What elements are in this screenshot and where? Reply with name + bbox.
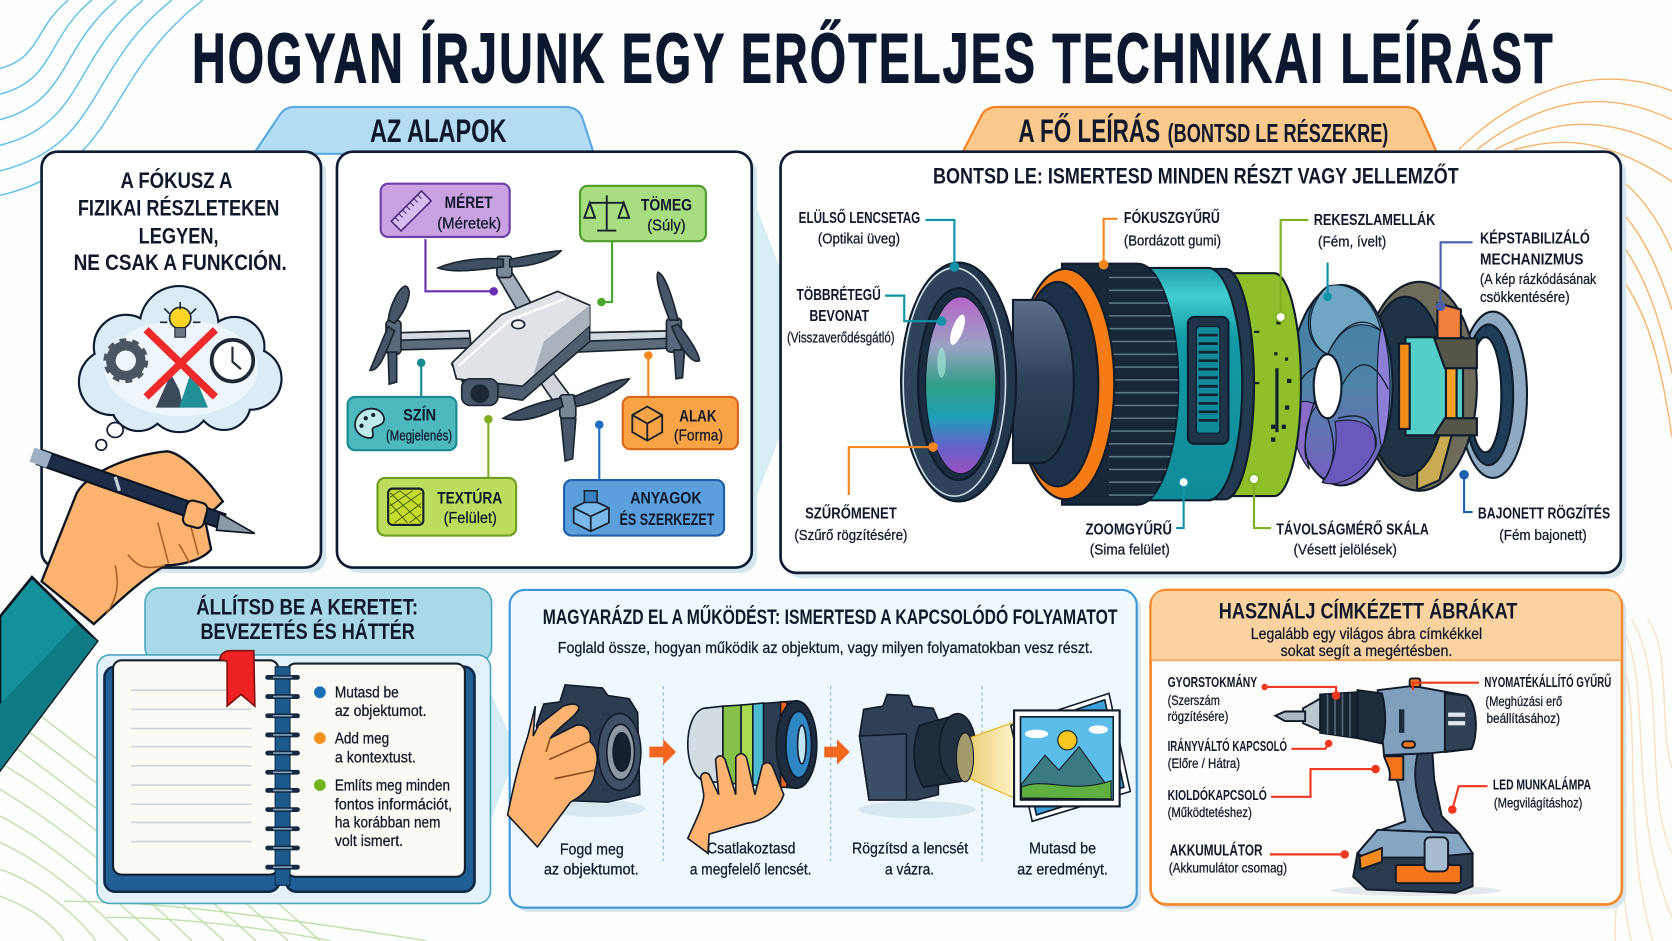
step 4: show the result: Mutasd be [1029,840,1096,857]
pale connector arrows [486,182,784,832]
heading: BEVEZETÉS ÉS HÁTTÉR [200,619,415,644]
intro checklist: Add meg [335,730,389,747]
label: materials [564,480,724,536]
callout: zoom ring: (Sima felület) [1090,542,1170,559]
callout: focus ring [1124,208,1221,250]
callout: aperture blades [1314,210,1436,251]
callout: coating [787,285,895,347]
callout: bayonet: (Fém bajonett) [1499,527,1587,544]
callout: front element [799,208,920,247]
decorative curves: bottom right [1615,619,1672,941]
heading band: Legalább egy világos ábra címkékkel [1251,626,1482,643]
label: mass [580,186,706,241]
focus statement: NE CSAK A FUNKCIÓN. [74,250,287,275]
callout: torque ring: NYOMATÉKÁLLÍTÓ GYŰRŰ [1484,673,1611,691]
callout: trigger: (Működtetéshez) [1168,804,1252,820]
callout: front element: (Optikai üveg) [818,230,900,247]
leader lines [417,239,653,480]
drone illustration [370,251,700,461]
intro checklist: ha korábban nem [335,815,440,832]
intro checklist [314,685,452,850]
notebook [104,651,475,892]
decorative curves: top right [1459,79,1672,437]
icon: bookmark [220,651,255,706]
callout: stabiliser [1480,228,1597,306]
leader lines [849,219,1473,528]
focus statement: FIZIKAI RÉSZLETEKEN [78,196,279,221]
callout: coating: BEVONAT [809,308,869,325]
arrow: step two to three [824,739,850,765]
callout: stabiliser: csökkentésére) [1480,290,1570,306]
intro checklist: az objektumot. [335,703,427,720]
callout: aperture blades: REKESZLAMELLÁK [1314,210,1436,229]
callout: battery [1169,840,1287,876]
heading: MAGYARÁZD EL A MŰKÖDÉST: ISMERTESD A KAPCSOLÓDÓ FOLYAMATOT [543,604,1118,629]
intro checklist: volt ismert. [335,833,403,850]
intro checklist: fontos információt, [335,797,452,814]
label: colour: (Megjelenés) [386,428,452,445]
lens illustration [901,263,1527,505]
callout: direction switch: IRÁNYVÁLTÓ KAPCSOLÓ [1168,737,1287,755]
step 4: show the result: az eredményt. [1017,862,1108,879]
callout: stabiliser: MECHANIZMUS [1480,252,1584,269]
callout: coating: TÖBBRÉTEGŰ [797,285,881,304]
section tab: az alapok: AZ ALAPOK [370,113,507,149]
step 1: hold the object: Fogd meg [560,841,624,858]
label: shape: ALAK [679,406,717,425]
callout: bayonet: BAJONETT RÖGZÍTÉS [1478,503,1610,522]
decorative curves: top left [0,0,203,195]
callout: front element: ELÜLSŐ LENCSETAG [799,208,920,227]
decorative curves: bottom left [0,683,427,941]
callout: zoom ring [1086,519,1172,559]
callout: distance scale [1276,519,1429,559]
panel: main description tab [962,107,1437,154]
callout: direction switch: (Előre / Hátra) [1168,755,1240,771]
label: materials: ANYAGOK [630,489,702,508]
heading [145,588,492,662]
panel: labelled diagrams [1151,590,1626,909]
callout: focus ring: FÓKUSZGYŰRŰ [1124,208,1220,227]
focus statement: A FÓKUSZ A [120,168,232,193]
step 3 caption: a vázra. [885,862,934,879]
intro checklist: Említs meg minden [335,777,450,794]
icon: thought cloud with crossed-out function icons [80,287,280,450]
callout: distance scale: TÁVOLSÁGMÉRŐ SKÁLA [1276,519,1429,538]
callout: trigger: KIOLDÓKAPCSOLÓ [1168,786,1267,804]
step 4: show the result [956,693,1130,879]
label: texture: (Felület) [444,510,497,527]
heading band: HASZNÁLJ CÍMKÉZETT ÁBRÁKAT [1219,599,1518,624]
icon: pen [32,455,255,533]
label: size: (Méretek) [437,215,501,232]
callout: trigger [1168,786,1267,820]
step 1: hold the object [508,685,645,879]
label: mass: (Súly) [647,218,686,235]
heading: ÁLLÍTSD BE A KERETET: [196,594,418,619]
callout: coating: (Visszaverődésgátló) [787,330,895,347]
callout: filter thread [794,503,907,544]
step 2: attach the lens: Csatlakoztasd [707,840,795,857]
subheading: Foglald össze, hogyan működik az objektum, vagy milyen folyamatokban vesz részt. [558,640,1093,657]
label: colour [348,397,456,450]
callout: zoom ring: ZOOMGYŰRŰ [1086,519,1172,538]
drill illustration [1275,678,1501,896]
callout: aperture blades: (Fém, ívelt) [1318,234,1386,251]
callout: torque ring [1484,673,1611,726]
step 2: attach the lens [688,701,817,879]
callout: chuck [1168,674,1257,724]
heading: BONTSD LE: ISMERTESD MINDEN RÉSZT VAGY JELLEMZŐT [933,164,1459,189]
panel: framing / introduction [97,588,492,903]
step 1: hold the object: az objektumot. [544,862,639,879]
icon: sleeve [0,577,97,770]
distance scale marks [1254,320,1291,442]
panel: lens exploded view [781,152,1626,578]
label: size [381,184,510,237]
section tab: az alapok [254,107,594,154]
intro checklist: Mutasd be [335,685,399,702]
callout: led lamp [1493,776,1591,810]
callout: led lamp: (Megvilágításhoz) [1494,794,1582,810]
callout: chuck: rögzítésére) [1168,708,1228,724]
heading band [1152,591,1621,660]
panel: drone basics [337,152,757,573]
step 3: mount the lens [858,694,976,818]
label: texture: TEXTÚRA [437,489,502,508]
leader lines [1261,683,1488,859]
callout: bayonet [1478,503,1610,544]
callout: direction switch [1168,737,1287,771]
panel: how it works [508,590,1141,912]
callout: stabiliser: (A kép rázkódásának [1480,272,1597,288]
step 2: attach the lens: a megfelelő lencsét. [690,862,811,879]
callout: led lamp: LED MUNKALÁMPA [1493,776,1591,793]
focus statement [74,168,287,275]
callout: torque ring: (Meghúzási erő [1485,693,1562,709]
pen and hand illustration [0,451,255,770]
callout: battery: AKKUMULÁTOR [1170,840,1263,859]
step 3 caption: Rögzítsd a lencsét [852,840,969,857]
label: materials: ÉS SZERKEZET [620,510,714,529]
focus statement: LEGYEN, [139,223,219,248]
label: mass: TÖMEG [641,195,692,214]
panel: main description tab: (BONTSD LE RÉSZEKRE) [1168,119,1388,148]
callout: filter thread: (Szűrő rögzítésére) [794,527,907,544]
step 3 caption [852,840,969,879]
label: texture [377,478,516,536]
callout: stabiliser: KÉPSTABILIZÁLÓ [1480,228,1590,247]
label: shape [623,397,738,449]
callout: filter thread: SZŰRŐMENET [805,503,897,522]
callout: distance scale: (Vésett jelölések) [1293,542,1397,559]
label: colour: SZÍN [403,405,436,424]
callout: chuck: (Szerszám [1168,692,1220,708]
label: shape: (Forma) [674,428,723,445]
label: size: MÉRET [445,193,493,212]
intro checklist: a kontextust. [335,750,416,767]
callout: chuck: GYORSTOKMÁNY [1168,674,1257,691]
panel: focus on physical details [42,152,326,573]
arrow: step one to two [649,739,676,765]
panel: main description tab: A FŐ LEÍRÁS [1018,113,1160,149]
callout: focus ring: (Bordázott gumi) [1124,233,1221,250]
callout: battery: (Akkumulátor csomag) [1169,860,1287,876]
callout: torque ring: beállításához) [1486,710,1560,726]
heading band: sokat segít a megértésben. [1281,643,1452,660]
